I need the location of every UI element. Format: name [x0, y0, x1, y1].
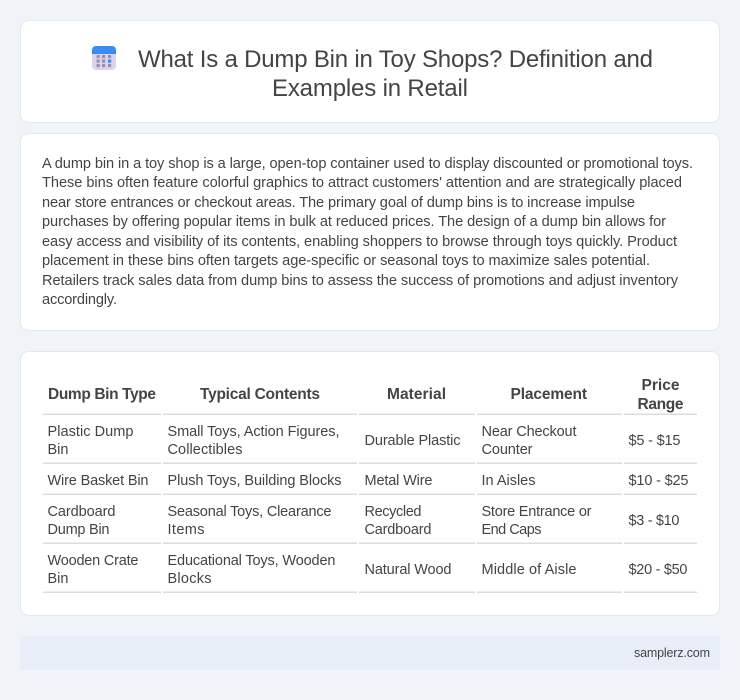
row: cardboard dump bin: Items: [168, 522, 204, 538]
row: wooden crate bin: $20 - $50: [628, 562, 688, 578]
row: wooden crate bin: Middle of Aisle: [482, 562, 576, 578]
row: wire basket bin: Wire Basket Bin: [48, 473, 148, 489]
row: cardboard dump bin: End Caps: [482, 522, 542, 538]
row: wire basket bin: $10 - $25: [628, 473, 688, 489]
table header row: Material: [387, 386, 446, 403]
table header row: Typical Contents: [200, 386, 320, 403]
panel: comparison table: [20, 352, 720, 616]
description text: accordingly.: [42, 292, 117, 308]
row: wire basket bin: Plush Toys, Building Blocks: [168, 473, 342, 489]
row: wooden crate bin: Blocks: [168, 571, 212, 587]
row: wooden crate bin: Educational Toys, Wooden: [168, 553, 336, 569]
description text: purchases by offering popular items in bulk at reduced prices. The design of a dump bin allows for: [42, 214, 666, 230]
title: [138, 46, 653, 102]
row: plastic dump bin: $5 - $15: [628, 433, 680, 449]
description text: near store entrances or checkout areas. The primary goal of dump bins is to increase impulse: [42, 195, 635, 211]
title: Examples in Retail: [272, 75, 468, 102]
row: wooden crate bin: Bin: [48, 571, 68, 587]
description text: These bins often feature colorful graphics to attract customers' attention and are strategically placed: [42, 175, 682, 191]
row: plastic dump bin: Counter: [482, 442, 533, 458]
footer bar: [20, 636, 720, 670]
panel: description: [20, 134, 720, 330]
title: What Is a Dump Bin in Toy Shops? Definition and: [138, 46, 653, 73]
description text: [42, 156, 693, 308]
row: plastic dump bin: Near Checkout: [482, 424, 576, 440]
row: cardboard dump bin: Dump Bin: [48, 522, 110, 538]
row: cardboard dump bin: Store Entrance or: [482, 504, 592, 520]
row: wooden crate bin: Natural Wood: [364, 562, 452, 578]
row: plastic dump bin: Collectibles: [168, 442, 242, 458]
icon: calendar: [92, 46, 116, 70]
row: cardboard dump bin: Cardboard: [364, 522, 432, 538]
row: wooden crate bin: [48, 553, 688, 587]
row: plastic dump bin: Bin: [48, 442, 68, 458]
table header row: [48, 377, 684, 413]
table header row: Range: [638, 396, 684, 413]
row: cardboard dump bin: Recycled: [364, 504, 422, 520]
description text: A dump bin in a toy shop is a large, open-top container used to display discounted or promotional toys.: [42, 156, 693, 172]
row: wire basket bin: [48, 473, 688, 489]
row: cardboard dump bin: Seasonal Toys, Clearance: [168, 504, 332, 520]
row: cardboard dump bin: [48, 504, 680, 538]
panel: title header: [20, 20, 720, 122]
row: plastic dump bin: [48, 424, 680, 458]
footer source text: samplerz.com: [634, 646, 710, 660]
row: wire basket bin: Metal Wire: [364, 473, 432, 489]
row: cardboard dump bin: $3 - $10: [628, 513, 680, 529]
table header row: Dump Bin Type: [48, 386, 156, 403]
row: wooden crate bin: Wooden Crate: [48, 553, 138, 569]
row: wire basket bin: In Aisles: [482, 473, 536, 489]
table header row: Placement: [510, 386, 587, 403]
description text: placement in these bins often targets age-specific or seasonal toys to maximize sales potential.: [42, 253, 650, 269]
row: plastic dump bin: Durable Plastic: [364, 433, 460, 449]
table header row: Price: [642, 377, 680, 394]
row: cardboard dump bin: Cardboard: [48, 504, 116, 520]
description text: Retailers track sales data from dump bins to assess the success of promotions and adjust inventory: [42, 273, 679, 289]
description text: easy access and visibility of its contents, enabling shoppers to browse through toys quickly. Product: [42, 234, 677, 250]
row: plastic dump bin: Plastic Dump: [48, 424, 134, 440]
row: plastic dump bin: Small Toys, Action Figures,: [168, 424, 340, 440]
